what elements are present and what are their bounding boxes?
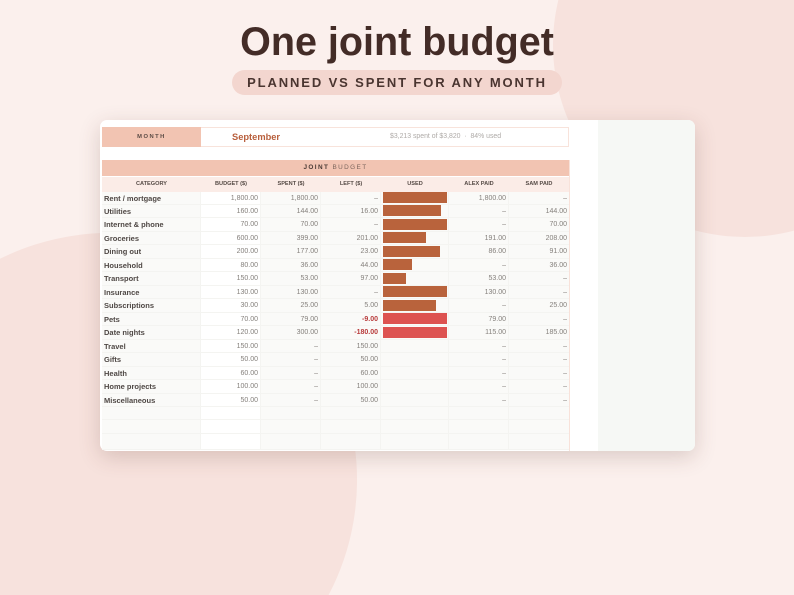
row: subscriptions	[102, 299, 569, 313]
row: internet: 70.00	[240, 221, 258, 228]
row: utilities: 16.00	[360, 208, 378, 215]
row: dining: Dining out	[104, 247, 141, 256]
row: health: Health	[104, 369, 127, 378]
title: One joint budget	[240, 20, 554, 64]
row: insurance: 130.00	[297, 289, 318, 296]
month value: September	[232, 132, 280, 142]
spreadsheet card	[100, 120, 695, 451]
table title band: JOINT BUDGET	[303, 164, 368, 171]
row: pets: –	[563, 316, 567, 323]
row: rent: 1,800.00	[231, 194, 258, 202]
row: groceries	[102, 232, 569, 245]
row: home projects: –	[502, 383, 506, 390]
row: rent: Rent / mortgage	[104, 194, 161, 202]
row: gifts: 50.00	[240, 356, 258, 363]
row: home projects: Home projects	[104, 382, 156, 391]
row: transport: –	[563, 275, 567, 282]
row: household: Household	[104, 261, 143, 270]
row: miscellaneous: –	[502, 397, 506, 404]
table header: CATEGORY	[136, 180, 167, 186]
row: travel: –	[314, 343, 318, 350]
table rows	[102, 192, 569, 450]
row: utilities: 160.00	[237, 208, 258, 215]
row: insurance: 130.00	[485, 289, 506, 296]
row: dining: 23.00	[360, 248, 378, 255]
row: subscriptions: Subscriptions	[104, 301, 154, 310]
row: utilities: 144.00	[546, 208, 567, 215]
row: transport: 97.00	[360, 275, 378, 282]
row: health	[102, 367, 569, 380]
side panel	[598, 120, 695, 451]
subtitle pill: PLANNED VS SPENT FOR ANY MONTH	[247, 75, 547, 90]
row: miscellaneous: 50.00	[360, 397, 378, 404]
row: travel: –	[563, 343, 567, 350]
row: date nights: 300.00	[297, 329, 318, 336]
row: miscellaneous: Miscellaneous	[104, 396, 155, 405]
row: household: 44.00	[360, 262, 378, 269]
row: groceries: 201.00	[357, 235, 378, 242]
row: health: 60.00	[240, 370, 258, 377]
month label	[102, 127, 201, 147]
row: internet: 70.00	[300, 221, 318, 228]
row: date nights: 120.00	[237, 329, 258, 336]
row: travel: 150.00	[357, 343, 378, 350]
empty row 1	[102, 407, 569, 420]
row: transport: 53.00	[300, 275, 318, 282]
row: utilities: –	[502, 208, 506, 215]
row: insurance: –	[563, 289, 567, 296]
row: insurance: Insurance	[104, 288, 139, 297]
row: home projects: –	[563, 383, 567, 390]
row: subscriptions: –	[502, 302, 506, 309]
row: dining	[102, 245, 569, 259]
row: transport	[102, 272, 569, 286]
row: pets: 70.00	[240, 316, 258, 323]
row: dining: 91.00	[549, 248, 567, 255]
table header: BUDGET ($)	[215, 180, 247, 186]
right table edge	[569, 160, 570, 451]
row: dining: 177.00	[297, 248, 318, 255]
row: gifts: –	[314, 356, 318, 363]
row: health: –	[563, 370, 567, 377]
row: travel: –	[502, 343, 506, 350]
row: utilities	[102, 205, 569, 218]
row: household: –	[502, 262, 506, 269]
row: pets: 79.00	[488, 316, 506, 323]
row: home projects	[102, 380, 569, 394]
row: insurance: 130.00	[237, 289, 258, 296]
row: subscriptions: 5.00	[364, 302, 378, 309]
empty row 3	[102, 434, 569, 450]
row: utilities: Utilities	[104, 207, 131, 216]
row: date nights: -180.00	[354, 329, 378, 336]
row: gifts: –	[563, 356, 567, 363]
row: pets: 79.00	[300, 316, 318, 323]
row: rent: 1,800.00	[291, 194, 318, 202]
row: internet: –	[374, 221, 378, 228]
row: pets: Pets	[104, 315, 120, 324]
row: rent	[102, 192, 569, 205]
row: home projects: 100.00	[237, 383, 258, 390]
row: gifts: Gifts	[104, 355, 121, 364]
row: miscellaneous: –	[314, 397, 318, 404]
row: date nights: 185.00	[546, 329, 567, 336]
row: dining: 200.00	[237, 248, 258, 255]
row: travel	[102, 340, 569, 353]
row: groceries: 208.00	[546, 235, 567, 242]
row: groceries: 399.00	[297, 235, 318, 242]
row: gifts: 50.00	[360, 356, 378, 363]
row: groceries: 600.00	[237, 235, 258, 242]
table header: SPENT ($)	[277, 180, 305, 186]
month summary: $3,213 spent of $3,820 · 84% used	[390, 133, 501, 140]
row: insurance	[102, 286, 569, 299]
row: home projects: –	[314, 383, 318, 390]
row: internet	[102, 218, 569, 232]
row: pets: -9.00	[362, 316, 378, 323]
row: date nights	[102, 326, 569, 340]
row: miscellaneous	[102, 394, 569, 407]
row: rent: –	[563, 194, 567, 202]
row: household: 80.00	[240, 262, 258, 269]
row: internet: –	[502, 221, 506, 228]
row: internet: Internet & phone	[104, 220, 164, 229]
row: subscriptions: 25.00	[549, 302, 567, 309]
subtitle pill	[232, 70, 562, 95]
month label: MONTH	[137, 134, 166, 140]
row: insurance: –	[374, 289, 378, 296]
table header: LEFT ($)	[340, 180, 362, 186]
row: transport: 150.00	[237, 275, 258, 282]
table header	[102, 176, 569, 192]
row: health: –	[314, 370, 318, 377]
row: transport: Transport	[104, 274, 139, 283]
row: travel: 150.00	[237, 343, 258, 350]
row: dining: 86.00	[488, 248, 506, 255]
empty row 2	[102, 420, 569, 434]
row: groceries: Groceries	[104, 234, 139, 243]
row: date nights: 115.00	[485, 329, 506, 336]
row: internet: 70.00	[549, 221, 567, 228]
row: gifts	[102, 353, 569, 367]
month bar	[102, 127, 569, 147]
row: date nights: Date nights	[104, 328, 145, 337]
row: health: 60.00	[360, 370, 378, 377]
row: rent: 1,800.00	[479, 194, 506, 202]
row: subscriptions: 30.00	[240, 302, 258, 309]
row: travel: Travel	[104, 342, 126, 351]
row: pets	[102, 313, 569, 326]
row: subscriptions: 25.00	[300, 302, 318, 309]
row: health: –	[502, 370, 506, 377]
table header: SAM PAID	[526, 180, 552, 186]
row: home projects: 100.00	[357, 383, 378, 390]
table header: USED	[407, 180, 423, 186]
row: miscellaneous: 50.00	[240, 397, 258, 404]
row: rent: –	[374, 194, 378, 202]
row: household	[102, 259, 569, 272]
row: utilities: 144.00	[297, 208, 318, 215]
row: transport: 53.00	[488, 275, 506, 282]
row: household: 36.00	[300, 262, 318, 269]
row: groceries: 191.00	[485, 235, 506, 242]
row: gifts: –	[502, 356, 506, 363]
table header: ALEX PAID	[464, 180, 494, 186]
row: household: 36.00	[549, 262, 567, 269]
row: miscellaneous: –	[563, 397, 567, 404]
table title band	[102, 160, 569, 176]
